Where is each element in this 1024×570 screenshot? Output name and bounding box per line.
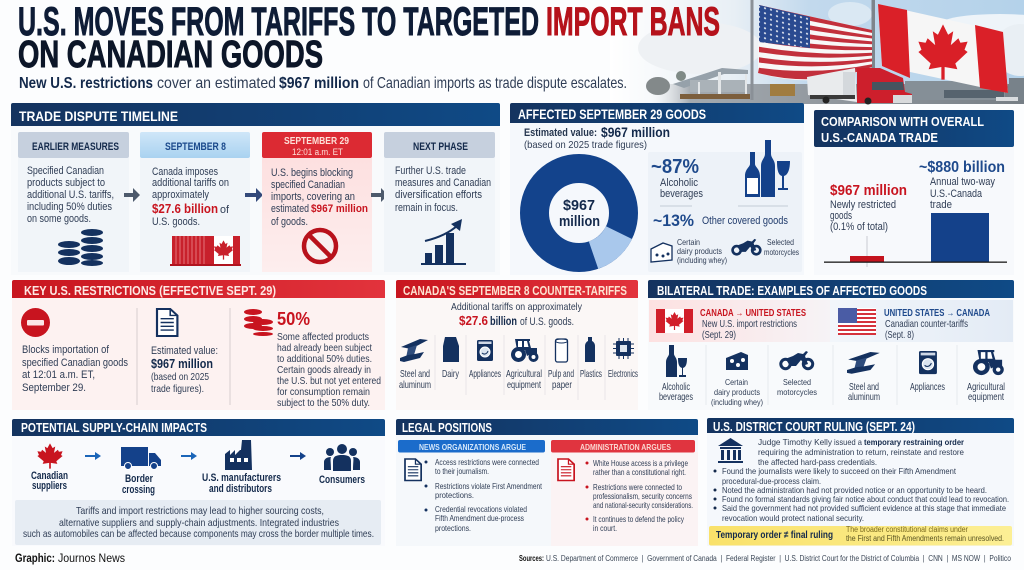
example: agricultural equipment (967, 350, 1005, 403)
restriction: estimated value: (based on 2025 (151, 371, 209, 383)
example: appliances (910, 351, 945, 393)
Canada to United States: CANADA → UNITED STATES (700, 308, 806, 319)
restriction: blocks importation: at 12:01 a.m. ET, (22, 369, 95, 381)
card: next phase: diversification efforts (395, 189, 482, 201)
sources: Sources: (519, 554, 544, 563)
item: agricultural equipment: Agricultural (506, 368, 542, 380)
example: alcoholic beverages: beverages (659, 391, 693, 403)
restriction: 50% duties: subject to the 50% duty. (277, 397, 370, 409)
administration argues: Restrictions were connected to (593, 482, 682, 492)
example: alcoholic beverages (659, 345, 693, 403)
icon: prohibition sign (304, 230, 336, 262)
card: september 8: Canada imposes (152, 166, 218, 178)
comparison heading (814, 110, 1014, 147)
ruling summary: requiring the administration to return, reinstate and restore (758, 447, 964, 457)
comparison bar chart: $967 million (830, 182, 907, 199)
card: earlier measures: on some goods. (27, 213, 91, 225)
ruling summary: the affected hard-pass credentials. (758, 457, 877, 467)
card: september 29: estimated (271, 203, 309, 215)
breakdown panel: motorcycles (764, 247, 799, 257)
step: consumers (319, 444, 365, 486)
supply-chain heading: POTENTIAL SUPPLY-CHAIN IMPACTS (21, 421, 207, 435)
counter-tariffs summary: Additional tariffs on approximately (451, 301, 583, 313)
item: pulp and paper (548, 339, 574, 391)
United States to Canada: (Sept. 8) (885, 329, 914, 341)
ruling summary: temporary restraining order (864, 437, 965, 447)
card: september 29: $967 million (311, 203, 368, 215)
United States to Canada (830, 300, 1013, 342)
restriction: estimated value: Estimated value: (151, 345, 218, 357)
callout: temporary order: the First and Fifth Amendments remain unresolved. (846, 534, 1004, 543)
card: september 29 (262, 132, 372, 272)
card: next phase: measures and Canadian (395, 177, 491, 189)
icon: courthouse (718, 438, 743, 463)
donut chart: $967 (563, 197, 595, 214)
administration argues: professionalism, security concerns (593, 491, 692, 501)
breakdown panel: dairy products (677, 246, 722, 256)
administration argues: and national-security considerations. (593, 500, 693, 510)
donut chart: million (559, 213, 600, 230)
icon: rising bar chart (421, 219, 466, 265)
example: steel and aluminum: aluminum (848, 391, 880, 403)
news organizations argue: Credential revocations violated (435, 504, 527, 514)
ruling summary (758, 437, 965, 467)
news organizations argue: Restrictions violate First Amendment (435, 481, 542, 491)
example: steel and aluminum: Steel and (849, 381, 879, 393)
United States to Canada: UNITED STATES → CANADA (884, 308, 990, 319)
title: U.S. MOVES FROM TARIFFS TO TARGETED (18, 0, 539, 44)
card: earlier measures (18, 132, 129, 272)
example: dairy products (711, 352, 763, 407)
step: consumers: Consumers (319, 474, 365, 486)
step: U.S. manufacturers and distributors (202, 440, 281, 495)
restriction: estimated value (151, 309, 218, 395)
step: U.S. manufacturers and distributors: and distributors (209, 483, 272, 495)
example: motorcycles: Selected (783, 377, 811, 387)
panel: trade dispute timeline (11, 103, 500, 275)
example: steel and aluminum (847, 352, 880, 403)
card: september 29: imports, covering an (271, 191, 355, 203)
icon: motorcycle (733, 239, 760, 254)
supply-chain note: such as automobiles can be affected because components may cross the border multiple times. (23, 528, 374, 540)
restriction: 50% duties: had already been subject (277, 342, 372, 354)
card: september 29: SEPTEMBER 29 (284, 136, 349, 147)
breakdown panel (648, 140, 802, 272)
item: dairy (442, 337, 460, 380)
panel: affected september 29 goods (510, 103, 804, 275)
news organizations argue (398, 440, 545, 533)
comparison bar chart: U.S.-Canada (930, 188, 983, 200)
example: dairy products: (including whey) (711, 397, 763, 407)
card: next phase: remain in focus. (395, 202, 458, 214)
callout: temporary order: The broader constitutional claims under (846, 525, 968, 534)
card: september 8: $27.6 billion (152, 201, 218, 216)
subtitle: $967 million (279, 75, 359, 92)
arrow (245, 188, 263, 202)
supply-chain note (15, 500, 381, 545)
administration argues: It continues to defend the policy (593, 514, 685, 524)
item: plastics (580, 337, 602, 380)
item: steel and aluminum: Steel and (400, 368, 430, 380)
estimated value: (based on 2025 trade figures) (524, 139, 647, 151)
supply-chain note: Tariffs and import restrictions may lead to higher sourcing costs, (76, 505, 324, 517)
ruling findings (714, 466, 1009, 523)
subtitle: New U.S. restrictions (19, 75, 153, 92)
arrow (181, 452, 197, 460)
administration argues: rather than a constitutional right. (593, 467, 686, 477)
arrow (371, 188, 388, 202)
step: U.S. manufacturers and distributors: U.S. manufacturers (202, 472, 281, 484)
item: electronics: Electronics (608, 368, 638, 380)
comparison heading: COMPARISON WITH OVERALL (821, 114, 984, 129)
card: next phase: Further U.S. trade (395, 165, 466, 177)
restriction: blocks importation (21, 308, 128, 394)
news organizations argue: protections. (435, 490, 474, 500)
administration argues: ADMINISTRATION ARGUES (580, 442, 671, 452)
restriction: 50% duties: 50% (277, 309, 310, 329)
example: motorcycles: motorcycles (777, 387, 817, 397)
breakdown panel: ~13% (653, 211, 694, 230)
breakdown panel: Certain (677, 237, 700, 247)
panel: key U.S. restrictions (12, 280, 385, 410)
ruling summary: Judge Timothy Kelly (758, 437, 833, 447)
news organizations argue: Access restrictions were connected (435, 457, 539, 467)
supply-chain note: alternative suppliers and supply-chain adjustments. Integrated industries (59, 517, 339, 529)
administration argues: in court. (593, 523, 617, 533)
subtitle: of Canadian imports as trade dispute escalates. (363, 75, 627, 92)
callout: temporary order: Temporary order ≠ final ruling (716, 529, 833, 541)
estimated value (524, 125, 670, 151)
United States to Canada: Canadian counter-tariffs (885, 318, 968, 330)
card: september 29: specified Canadian (271, 179, 345, 191)
arrow (290, 452, 306, 460)
breakdown panel: beverages (660, 188, 703, 200)
item: agricultural equipment: equipment (507, 379, 541, 391)
estimated value: Estimated value: (524, 127, 597, 139)
card: september 8 (140, 132, 250, 272)
example: agricultural equipment: Agricultural (967, 381, 1005, 393)
example: alcoholic beverages: Alcoholic (662, 381, 690, 393)
restriction: 50% duties: to additional 50% duties. (277, 353, 372, 365)
step: border crossing: Border (125, 473, 154, 485)
icon: bottles and glass (745, 140, 790, 197)
timeline heading (11, 103, 500, 126)
estimated value: $967 million (601, 125, 670, 140)
item: electronics (608, 338, 638, 380)
item: appliances: Appliances (469, 368, 501, 380)
item: plastics: Plastics (580, 368, 602, 380)
item: pulp and paper: paper (552, 379, 572, 391)
breakdown panel: (including whey) (677, 255, 727, 265)
ruling findings: revocation would protect national security. (722, 513, 864, 523)
item: steel and aluminum (399, 339, 431, 391)
key restrictions heading (12, 280, 385, 298)
restriction: 50% duties: Some affected products (277, 331, 369, 343)
ruling findings: Noted the administration had not provided notice or an opportunity to be heard. (722, 485, 987, 495)
step: border crossing: crossing (122, 484, 155, 496)
icon: dairy block (651, 243, 672, 262)
breakdown panel: Alcoholic (660, 177, 698, 189)
counter-tariffs heading (396, 280, 638, 298)
donut chart (534, 168, 632, 269)
example: dairy products: dairy products (714, 387, 760, 397)
comparison bar chart: Annual two-way (930, 176, 995, 188)
subtitle: cover an estimated (157, 75, 276, 92)
card: september 8: SEPTEMBER 8 (165, 141, 226, 153)
panel: comparison with overall U.S.-Canada trade (814, 110, 1014, 275)
card: september 8: U.S. goods. (152, 216, 200, 228)
bilateral heading: BILATERAL TRADE: EXAMPLES OF AFFECTED GOODS (657, 284, 927, 298)
card: september 8: approximately (152, 189, 209, 201)
graphic credit (15, 551, 125, 565)
administration argues (551, 440, 695, 533)
administration argues: White House access is a privilege (593, 458, 688, 468)
card: september 29: 12:01 a.m. ET (292, 147, 343, 158)
restriction: estimated value: trade figures). (151, 383, 204, 395)
breakdown panel: Other covered goods (702, 215, 788, 227)
step: Canadian suppliers: Canadian (31, 470, 68, 482)
ruling summary: issued a (834, 437, 862, 447)
counter-tariffs summary: of U.S. goods. (520, 316, 574, 328)
news organizations argue: to their journalism. (435, 466, 489, 476)
step: border crossing (121, 447, 161, 496)
panel: Canada's September 8 counter-tariffs (396, 280, 638, 410)
breakdown panel: ~87% (651, 156, 699, 178)
panel: U.S. district court ruling (707, 418, 1014, 546)
counter-tariffs summary: $27.6 (459, 313, 488, 328)
panel: bilateral trade examples (648, 280, 1014, 410)
counter-tariffs summary: billion (490, 314, 517, 328)
legal heading: LEGAL POSITIONS (402, 420, 492, 435)
item: pulp and paper: Pulp and (548, 368, 574, 380)
card: next phase (384, 132, 495, 272)
title: IMPORT BANS (546, 0, 720, 44)
ruling findings: procedural-due-process claim. (722, 476, 821, 486)
breakdown panel: Selected (767, 237, 794, 247)
comparison bar chart: goods (830, 210, 852, 222)
card: earlier measures: EARLIER MEASURES (32, 141, 119, 153)
title (18, 0, 720, 76)
comparison bar chart: Newly restricted (830, 199, 896, 211)
counter-tariffs heading: CANADA'S SEPTEMBER 8 COUNTER-TARIFFS (403, 284, 627, 298)
news organizations argue: protections. (435, 523, 471, 533)
news organizations argue: NEWS ORGANIZATIONS ARGUE (419, 442, 526, 452)
ruling findings: Found the journalists were likely to succeed on their Fifth Amendment (722, 466, 957, 476)
graphic credit: Graphic: (15, 551, 55, 565)
comparison bar chart (824, 159, 1007, 267)
restriction: 50% duties: for consumption remain (277, 386, 370, 398)
restriction: blocks importation: specified Canadian goods (22, 357, 128, 369)
card: earlier measures: products subject to (27, 177, 105, 189)
example: appliances: Appliances (910, 381, 945, 393)
arrow (124, 188, 140, 202)
affected goods heading (510, 103, 804, 123)
callout: temporary order (709, 525, 1012, 546)
item: dairy: Dairy (442, 368, 460, 380)
restriction: 50% duties (244, 309, 381, 409)
card: earlier measures: including 50% duties (27, 201, 112, 213)
counter-tariffs summary (451, 301, 583, 328)
item: steel and aluminum: aluminum (399, 379, 431, 391)
Canada to United States: (Sept. 29) (702, 329, 736, 341)
item: agricultural equipment (506, 339, 542, 391)
card: september 8: additional tariffs on (152, 177, 229, 189)
step: Canadian suppliers: suppliers (32, 480, 67, 492)
court heading: U.S. DISTRICT COURT RULING (SEPT. 24) (713, 420, 915, 434)
title: ON CANADIAN GOODS (18, 34, 323, 76)
example: dairy products: Certain (725, 377, 748, 387)
example: motorcycles (777, 351, 817, 397)
comparison heading: U.S.-CANADA TRADE (821, 130, 938, 145)
restriction: 50% duties: Certain goods already in (277, 364, 371, 376)
card: september 8: of (220, 204, 230, 216)
arrow (85, 452, 101, 460)
header photo: border crossing with U.S. and Canadian flags (610, 0, 1024, 104)
panel: legal positions (396, 419, 698, 546)
card: september 29: U.S. begins blocking (271, 167, 353, 179)
graphic credit: Journos News (58, 551, 125, 565)
step: Canadian suppliers (31, 443, 68, 492)
comparison bar chart: (0.1% of total) (830, 221, 888, 233)
key restrictions heading: KEY U.S. RESTRICTIONS (EFFECTIVE SEPT. 29) (24, 283, 276, 298)
restriction: 50% duties: the U.S. but not yet entered (277, 375, 381, 387)
restriction: estimated value: $967 million (151, 356, 213, 371)
card: earlier measures: additional U.S. tariffs, (27, 189, 114, 201)
item: appliances (469, 340, 501, 380)
card: next phase: NEXT PHASE (413, 141, 468, 153)
comparison bar chart: trade (930, 199, 952, 211)
subtitle (19, 75, 627, 92)
legal heading (396, 419, 698, 435)
Canada to United States: New U.S. import restrictions (702, 318, 797, 330)
example: agricultural equipment: equipment (968, 391, 1004, 403)
panel: potential supply-chain impacts (12, 419, 385, 546)
icon: shipping container with Canadian flag (170, 236, 241, 266)
Canada to United States (649, 300, 830, 342)
comparison bar chart: ~$880 billion (919, 159, 1005, 176)
card: earlier measures: Specified Canadian (27, 165, 104, 177)
supply-chain heading (12, 419, 385, 436)
timeline heading: TRADE DISPUTE TIMELINE (19, 108, 178, 124)
affected goods heading: AFFECTED SEPTEMBER 29 GOODS (518, 107, 706, 122)
news organizations argue: Fifth Amendment due-process (435, 513, 524, 523)
restriction: blocks importation: September 29. (22, 382, 86, 394)
icon: coin stacks (58, 229, 103, 266)
restriction: blocks importation: Blocks importation of (22, 344, 110, 356)
card: september 29: of goods. (271, 216, 308, 228)
